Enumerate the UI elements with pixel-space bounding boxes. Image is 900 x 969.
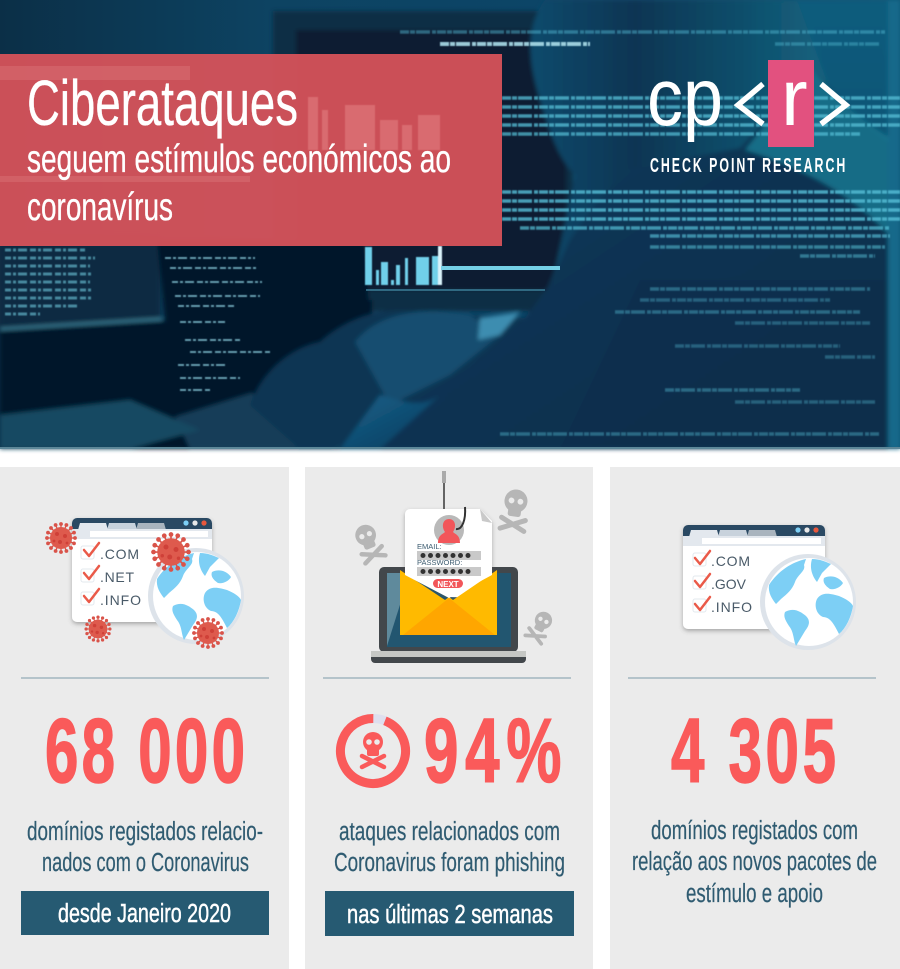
logo: Check Point Research: r [781,53,808,142]
panel: domains registered: nados com o Coronavirus [42,849,249,877]
right background [560,0,900,449]
stat: 94%: 94% [424,701,561,802]
stat: 68 000: 68 000 [45,701,245,802]
icon: browser with domains, virus and globe: .NET [100,569,134,585]
logo chevrons [738,84,846,124]
title banner: coronavírus [27,186,173,229]
time band [21,891,269,935]
hood [531,0,830,300]
arm lower [340,395,440,449]
lower right dark [560,280,890,449]
panel: phishing [305,467,593,969]
hero photo: hooded hacker at computers [0,0,900,449]
title banner [0,54,502,246]
icon: 94 percent ring with skull [331,709,415,793]
logo pink block [768,60,814,147]
panel: domains registered: desde Janeiro 2020 [58,900,231,928]
description: domínios registados relacio- [27,818,263,846]
back monitor [273,11,573,311]
icon: browser with domains and globe: .INFO [711,599,752,615]
laptop screen [157,240,372,417]
icon: browser with domains, virus and globe: .COM [100,546,139,562]
bright chart on back monitor [365,246,442,285]
panel: stimulus domains: estímulo e apoio [686,880,823,908]
icon: laptop with phishing envelope: EMAIL: [417,542,442,551]
keyboard [0,400,200,449]
banner ghost bars [308,97,440,150]
icon: laptop with phishing envelope: PASSWORD: [417,558,462,567]
subtitle: seguem estímulos económicos ao [27,138,451,181]
panel: stimulus domains [610,467,900,969]
shoulder highlight [745,68,893,240]
code rows on the right [400,32,900,434]
body [327,68,900,449]
icon: browser with domains and globe: .GOV [711,576,747,592]
code on laptop and left monitor [5,250,270,390]
title: Ciberataques [27,67,298,139]
wrist highlight [478,312,520,340]
hand and glove [250,310,525,449]
icon: browser with domains and globe [683,525,856,650]
laptop deck [175,393,345,449]
far edge strip [888,0,900,449]
logo wordmark: CHECK POINT RESEARCH [650,154,845,177]
banner ghost stripes [0,66,250,182]
icon: browser with domains, virus and globe: .INFO [100,592,141,608]
icon: laptop with phishing envelope: NEXT [437,580,459,589]
panel: phishing: Coronavirus foram phishing [334,849,565,877]
icon: browser with domains and globe: .COM [711,553,750,569]
panel: domains registered [0,467,289,969]
description: ataques relacionados com [339,818,560,846]
icon: browser with domains, virus and globe [45,518,244,649]
desk dark [0,300,372,449]
logo: Check Point Research [647,52,846,177]
stat: 4 305: 4 305 [671,701,836,802]
icon: laptop with phishing envelope [352,471,555,663]
panel: phishing: nas últimas 2 semanas [347,901,553,929]
left monitor [0,235,160,329]
logo letters: cp [647,52,723,143]
time band [325,891,574,936]
